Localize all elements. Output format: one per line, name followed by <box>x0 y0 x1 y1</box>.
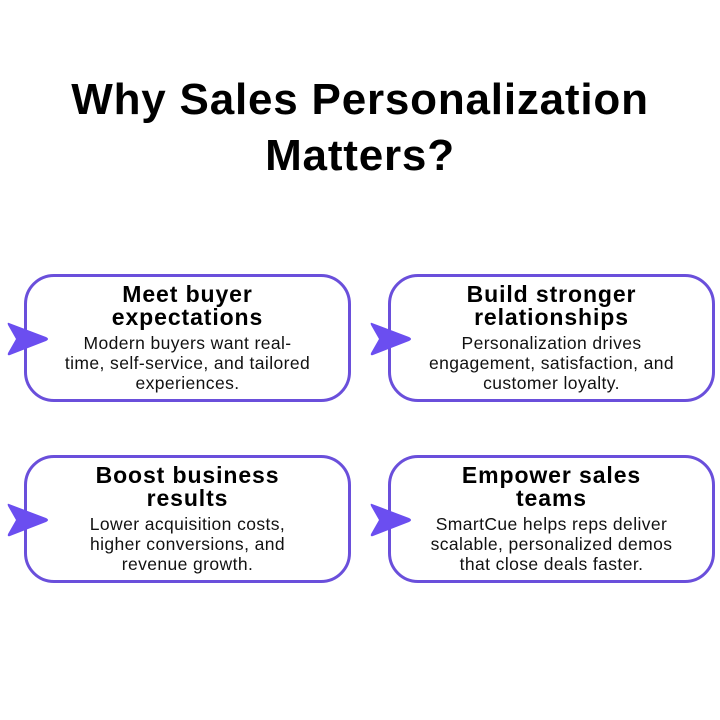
panel: empower sales teams <box>388 455 715 583</box>
panel: boost business results <box>24 455 351 583</box>
text: empower sales teams <box>431 514 672 574</box>
icon: arrow pointer 3 <box>8 504 48 536</box>
text: empower sales teams: SmartCue helps reps deliver <box>436 514 667 534</box>
heading: meet buyer expectations: Meet buyer <box>122 281 253 307</box>
heading: boost business results: results <box>147 485 228 511</box>
title: Matters? <box>265 131 455 180</box>
title <box>71 75 649 180</box>
heading: build stronger relationships: Build stronger <box>467 281 636 307</box>
text: empower sales teams: that close deals faster. <box>460 554 643 574</box>
icon: arrow pointer 4 <box>370 504 411 536</box>
text: build stronger relationships: customer loyalty. <box>483 373 620 393</box>
text: meet buyer expectations <box>65 333 310 393</box>
heading: boost business results: Boost business <box>96 462 279 488</box>
text: boost business results: revenue growth. <box>122 554 253 574</box>
text: meet buyer expectations: time, self-service, and tailored <box>65 353 310 373</box>
heading: boost business results <box>96 462 279 511</box>
text: build stronger relationships <box>429 333 674 393</box>
text: build stronger relationships: engagement, satisfaction, and <box>429 353 674 373</box>
text: boost business results: higher conversions, and <box>90 534 285 554</box>
icon: arrow pointer 1 <box>8 322 48 356</box>
heading: build stronger relationships: relationships <box>474 304 629 330</box>
icon: arrow pointer 2 <box>370 322 411 356</box>
text: meet buyer expectations: experiences. <box>135 373 240 393</box>
heading: meet buyer expectations <box>112 281 263 330</box>
text: boost business results: Lower acquisition costs, <box>90 514 285 534</box>
heading: empower sales teams <box>462 462 641 511</box>
heading: empower sales teams: teams <box>516 485 587 511</box>
text: build stronger relationships: Personalization drives <box>462 333 642 353</box>
title: Why Sales Personalization <box>71 75 649 124</box>
heading: meet buyer expectations: expectations <box>112 304 263 330</box>
text: empower sales teams: scalable, personalized demos <box>431 534 672 554</box>
panel: meet buyer expectations <box>24 274 351 402</box>
heading: build stronger relationships <box>467 281 636 330</box>
panel: build stronger relationships <box>388 274 715 402</box>
text: meet buyer expectations: Modern buyers want real- <box>83 333 292 353</box>
text: boost business results <box>90 514 285 574</box>
heading: empower sales teams: Empower sales <box>462 462 641 488</box>
